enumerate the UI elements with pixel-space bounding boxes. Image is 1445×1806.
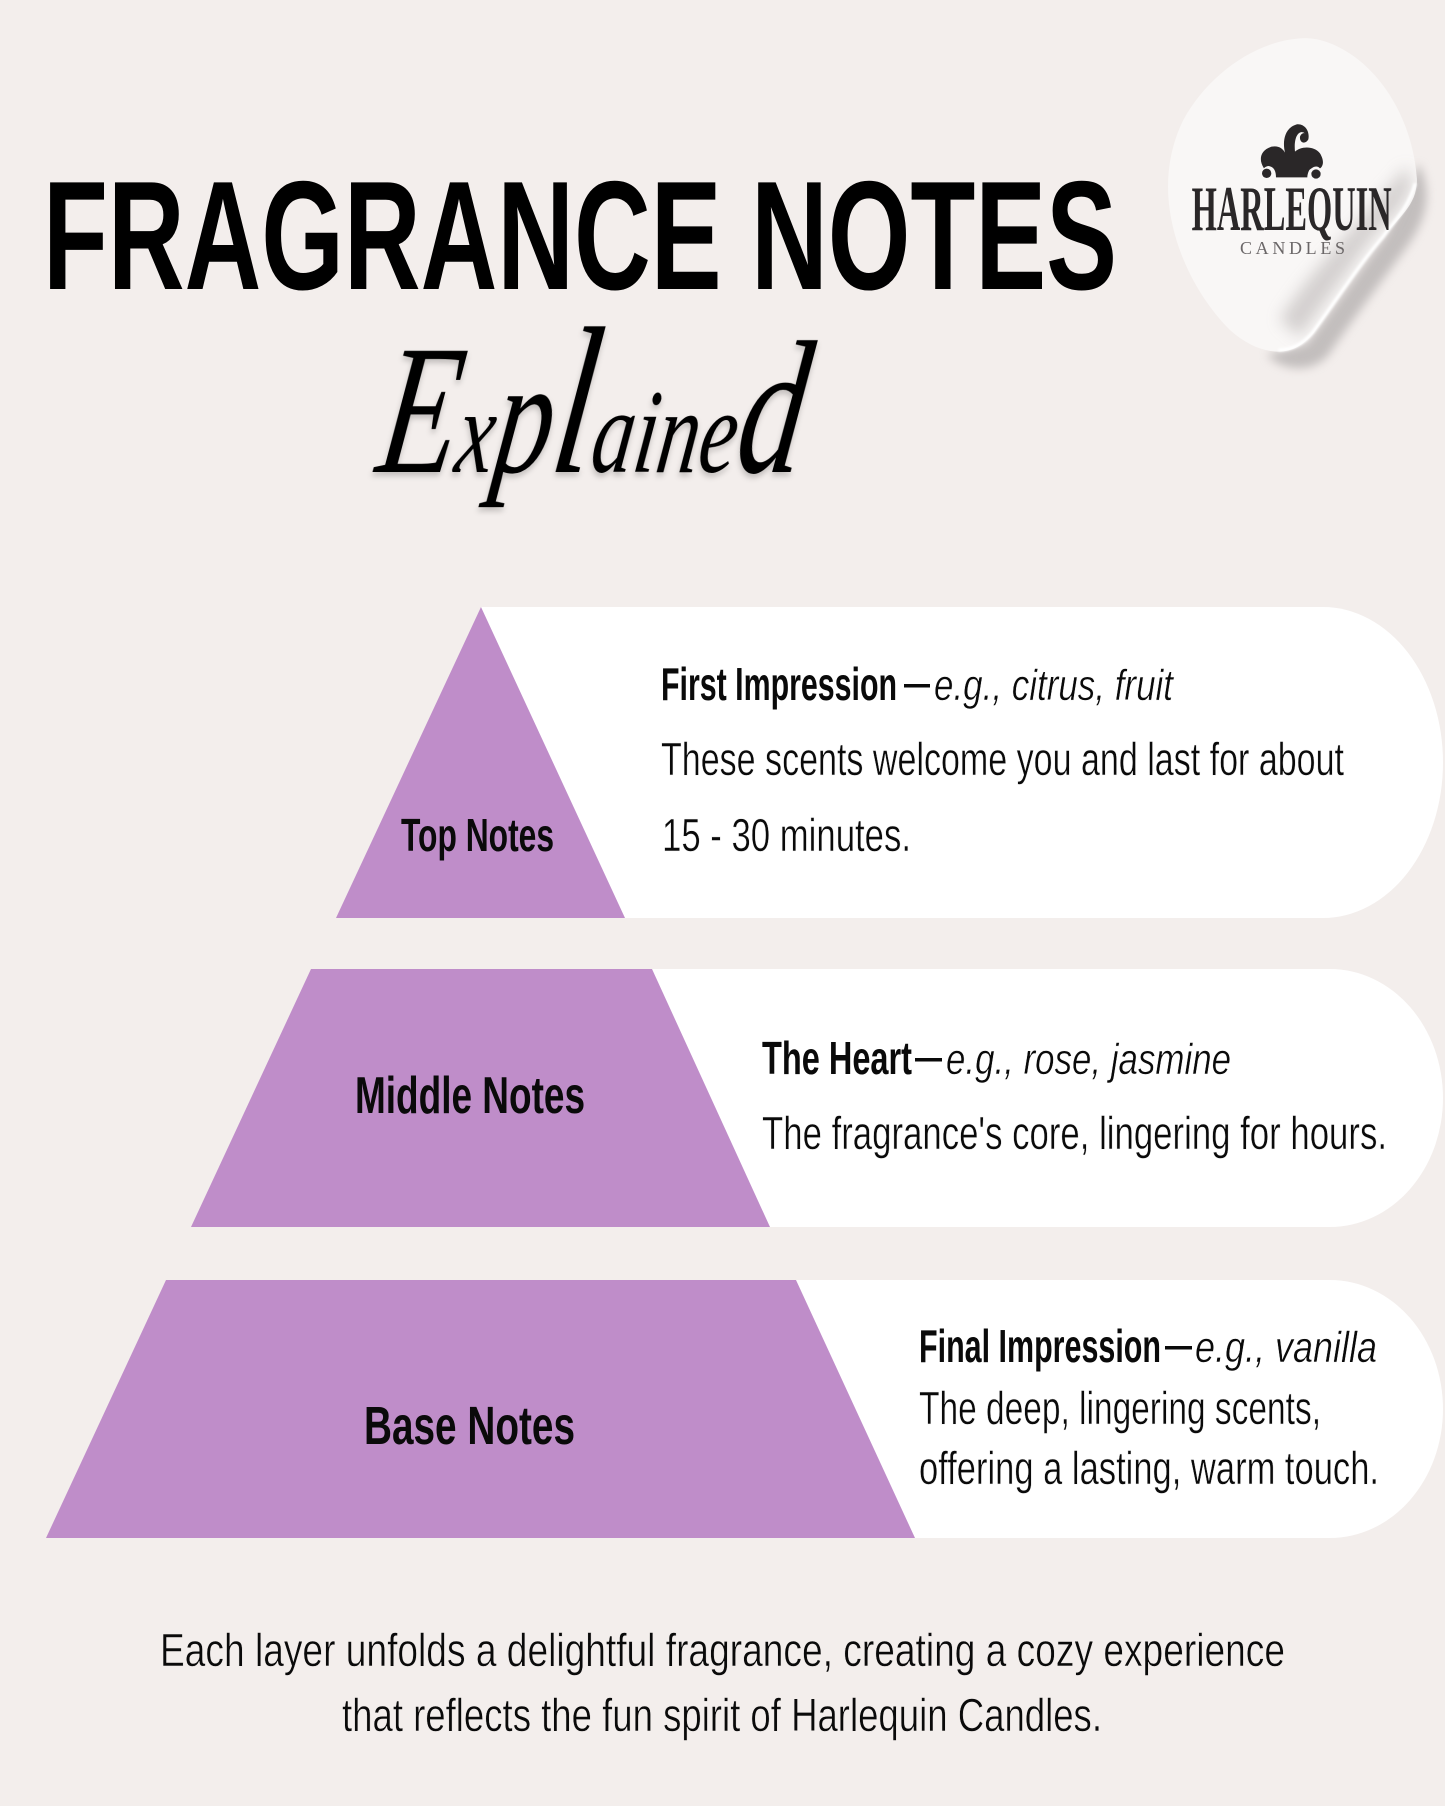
text block: top notes bbox=[661, 658, 1344, 861]
text block: base notes: Final Impression bbox=[919, 1320, 1161, 1372]
fold highlight bbox=[1278, 183, 1415, 350]
footer text bbox=[160, 1624, 1285, 1741]
fold shading bbox=[1280, 167, 1412, 337]
logo sticker bbox=[1168, 38, 1427, 368]
text block: base notes: e.g., vanilla bbox=[1195, 1323, 1377, 1372]
label: base notes: Base Notes bbox=[364, 1396, 575, 1456]
text block: top notes: First Impression bbox=[661, 658, 897, 710]
pill: middle notes bbox=[600, 969, 1443, 1227]
text block: top notes: e.g., citrus, fruit bbox=[934, 661, 1174, 710]
label: middle notes: Middle Notes bbox=[355, 1067, 585, 1125]
icon: jester hat bbox=[1261, 124, 1323, 179]
text block: top notes: 15 - 30 minutes. bbox=[662, 809, 911, 861]
label: top notes: Top Notes bbox=[401, 809, 554, 861]
sticker body bbox=[1168, 38, 1417, 352]
pill: base notes bbox=[700, 1280, 1443, 1538]
subtitle: Explained: Explained bbox=[365, 285, 826, 518]
text block: base notes bbox=[919, 1320, 1379, 1494]
text block: middle notes: The Heart bbox=[762, 1032, 912, 1084]
text block: middle notes bbox=[762, 1032, 1387, 1159]
text block: middle notes: e.g., rose, jasmine bbox=[946, 1035, 1231, 1084]
logo subtext: CANDLES bbox=[1240, 238, 1345, 258]
trapezoid: middle notes bbox=[191, 969, 770, 1227]
triangle: top notes bbox=[336, 607, 625, 918]
trapezoid: base notes bbox=[46, 1280, 915, 1538]
pill: top notes bbox=[481, 607, 1443, 918]
sticker shadow bbox=[1267, 163, 1427, 368]
footer text: that reflects the fun spirit of Harlequin Candles. bbox=[342, 1689, 1102, 1741]
